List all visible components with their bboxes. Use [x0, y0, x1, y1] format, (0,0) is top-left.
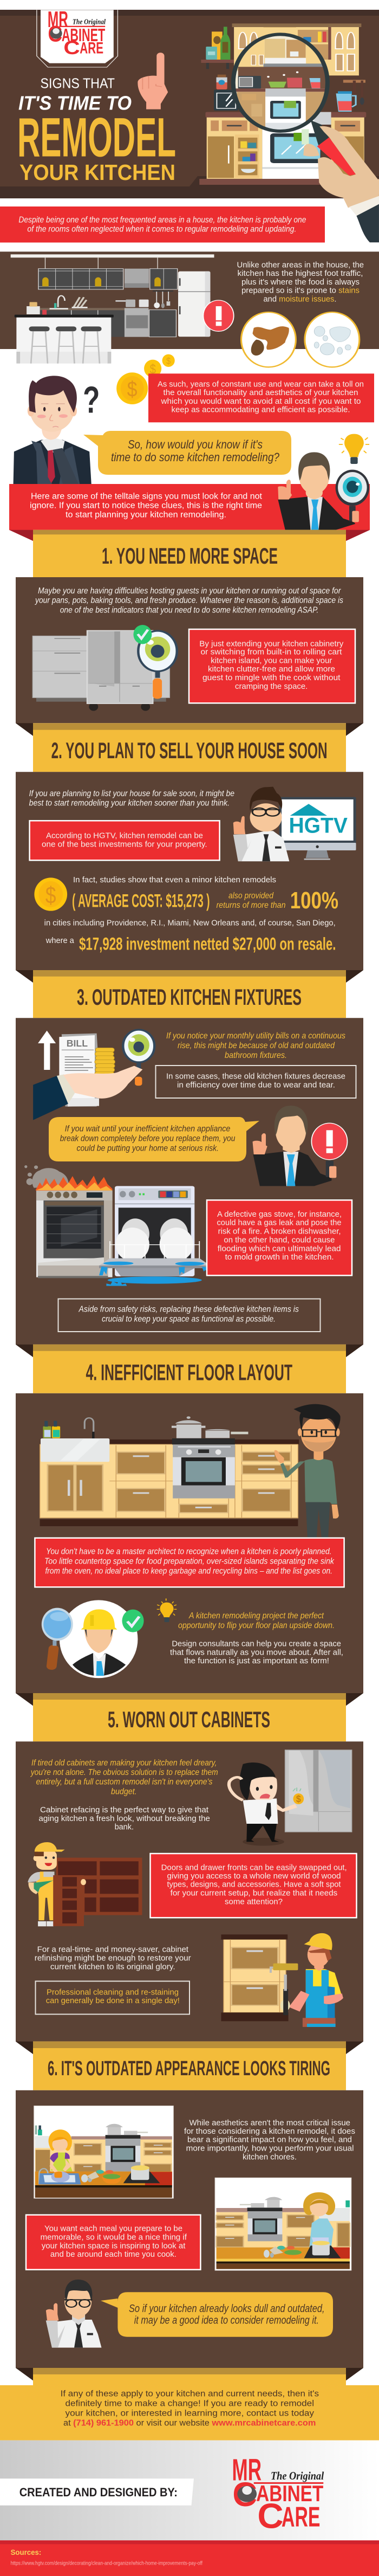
- panel: red cabinetry callout: guest to mingle with the cook without: [202, 674, 340, 682]
- upper cabinets: [232, 23, 361, 75]
- illustration: rising bill in hand: BILL: [67, 1038, 88, 1049]
- text: studies and statistics: ( AVERAGE COST: $15,273 ): [72, 890, 210, 911]
- icon: man with glasses waving: [275, 1404, 341, 1538]
- text: tired cabinets: If tired old cabinets are making your kitchen feel dreary,: [31, 1758, 217, 1767]
- icon: warning alert: [203, 300, 234, 331]
- panel: inspiring kitchen red callout: You want each meal you prepare to be: [44, 2225, 182, 2233]
- illustration: leaking dishwasher: [99, 1186, 210, 1286]
- panel: contact call to action: [0, 2368, 379, 2441]
- illustration: gray rolling cabinet with magnifier: [32, 625, 177, 711]
- text: refinishing: [35, 1946, 191, 1971]
- illustration: rising bill in hand: [33, 1030, 154, 1120]
- speech bubble: serious risk: could be putting your home at serious risk.: [77, 1144, 219, 1153]
- panel: doors and drawers red callout: Doors and drawer fronts can be easily swapped out,: [161, 1863, 347, 1872]
- panel: poor planning red callout: Too little countertop space for food preparation, over-sized islands separating the sink: [44, 1557, 335, 1566]
- text: utility bills: rise, this might be because of old and outdated: [178, 1041, 335, 1050]
- text: aesthetics: bear a significant impact on how you feel, and: [187, 2136, 352, 2145]
- icon: coins: $: [150, 361, 156, 377]
- icon: man with alert sign: [252, 1106, 347, 1186]
- panel: foot traffic band: [0, 251, 379, 349]
- text: aesthetics: for those considering a kitchen remodel, it does: [184, 2127, 355, 2136]
- icon: coins: $: [166, 356, 171, 366]
- illustration: burning oven: [24, 1165, 113, 1278]
- illustration: woman washing dishes: [34, 2106, 173, 2198]
- panel: red cost callout: [148, 373, 374, 422]
- panel: intro text: Despite being one of the most frequented areas in a house, the kitchen is probably one: [18, 216, 306, 225]
- panel: contact call to action: your kitchen, or interested in learning more, contact us today: [65, 2409, 314, 2418]
- panel: HGTV red callout: According to HGTV, kitchen remodel can be: [46, 832, 203, 841]
- icon: pointing hand: [138, 53, 168, 109]
- panel: section 3 body: [16, 1018, 363, 1357]
- text: aesthetics: While aesthetics aren't the most critical issue: [190, 2119, 350, 2127]
- section heading: 2: [33, 723, 346, 772]
- logo: header badge: [37, 7, 117, 67]
- base cabinets: [199, 112, 366, 185]
- panel: credits footer: [0, 2441, 379, 2540]
- text: refinishing: refinishing might be enough to restore your: [35, 1954, 191, 1962]
- text: floor plan opportunity: [170, 1611, 343, 1665]
- text: tired cabinets: you're not alone. The obvious solution is to replace them: [30, 1768, 218, 1777]
- illustration: man with HGTV monitor: [233, 787, 356, 861]
- section heading: 1: [33, 530, 346, 577]
- jar and microwave: [214, 75, 238, 111]
- panel: section 2 body: [16, 772, 363, 983]
- panel: gas stove red callout: risk of a fire. A broken dishwasher,: [218, 1228, 341, 1236]
- logo: header badge: C: [63, 37, 80, 59]
- callout: safety risks: Aside from safety risks, replacing these defective kitchen items is: [79, 1305, 299, 1314]
- illustration: kitchen with magnifying glass: [199, 23, 379, 242]
- icon: dollar coin: [34, 877, 67, 911]
- panel: section 4 body: [16, 1393, 363, 1706]
- decoration: section 3 folds: [16, 1345, 363, 1357]
- logo: footer: C: [257, 2496, 284, 2536]
- panel: doors and drawers red callout: some attention?: [225, 1897, 283, 1906]
- callout: professional cleaning: can generally be done in a single day!: [46, 1997, 180, 2005]
- panel: intro text: of the rooms often neglected when it comes to regular remodeling and updating.: [27, 225, 296, 234]
- panel: red cabinetry callout: By just extending your kitchen cabinetry: [199, 640, 344, 648]
- text: refinishing: For a real-time- and money-saver, cabinet: [37, 1946, 188, 1954]
- illustration: kitchen counter: [40, 1416, 299, 1526]
- logo: footer: C: [232, 2475, 257, 2514]
- panel: gas stove red callout: to mold growth in the kitchen.: [225, 1253, 334, 1262]
- illustration: worker painting cabinet: [221, 1933, 343, 2027]
- panel: red cabinetry callout: kitchen island, you can make your: [211, 656, 332, 665]
- panel: doors and drawers red callout: for your current setup, but realize that it needs: [171, 1889, 337, 1897]
- panel: doors and drawers red callout: [151, 1854, 356, 1918]
- text: foot traffic: and moisture issues.: [263, 295, 337, 304]
- text: refinishing: current kitchen to its original glory.: [50, 1962, 175, 1971]
- callout: safety risks: crucial to keep your space as functional as possible.: [102, 1315, 276, 1324]
- illustration: modern kitchen with island: [11, 254, 214, 364]
- panel: gas stove red callout: flooding which can ultimately lead: [218, 1244, 341, 1253]
- text: foot traffic: kitchen has the highest foot traffic,: [237, 269, 363, 278]
- panel: HGTV red callout: [30, 821, 220, 860]
- left shelf with bottles: [201, 27, 235, 69]
- text: foot traffic: [237, 261, 364, 304]
- text: aesthetics: more importantly, how you perform your usual: [186, 2144, 354, 2153]
- panel: HGTV red callout: one of the best investments for your property.: [42, 840, 207, 849]
- section heading: 5: [33, 1693, 346, 1741]
- utensils and jug: [336, 80, 365, 112]
- logo: footer: ARE: [282, 2501, 320, 2533]
- callout: professional cleaning: Professional cleaning and re-staining: [47, 1989, 179, 1997]
- title: SIGNS THAT: [40, 75, 115, 91]
- text: floor plan opportunity: Design consultants can help you create a space: [172, 1640, 341, 1649]
- panel: inspiring kitchen red callout: and be around each time you cook.: [50, 2250, 177, 2259]
- panel: poor planning red callout: [35, 1538, 344, 1587]
- magnifying glass frame: [233, 34, 328, 131]
- speech bubble: how would you know: [83, 431, 291, 475]
- logo: header badge: C: [48, 21, 62, 47]
- panel: header background: [0, 10, 379, 198]
- logo: footer: ABINET: [256, 2481, 323, 2506]
- text: tired cabinets: aging kitchen a fresh look, without breaking the: [38, 1815, 210, 1823]
- panel: section 6 body: [16, 2090, 363, 2380]
- icon: man with magnifier: [278, 452, 369, 530]
- icon: coins: [116, 354, 175, 404]
- panel: telltale signs banner: to start planning your kitchen remodeling.: [66, 510, 226, 519]
- panel: credits footer: CREATED AND DESIGNED BY:: [19, 2485, 178, 2499]
- panel: inspiring kitchen red callout: [26, 2215, 200, 2270]
- text: studies and statistics: returns of more than: [217, 901, 286, 910]
- panel: poor planning red callout: from the oven, no ideal place to keep garbage and recycling bins – and the list goes on.: [45, 1566, 332, 1576]
- panel: doors and drawers red callout: giving you access to a whole new world of wood: [167, 1872, 341, 1881]
- panel: intro text: [0, 206, 325, 243]
- panel: contact call to action: If any of these apply to your kitchen and current needs, then it's: [61, 2390, 319, 2399]
- text: foot traffic: Unlike other areas in the house, the: [237, 261, 364, 269]
- panel: red cost callout: keep as accommodating and efficient as possible.: [171, 406, 350, 415]
- speech bubble: serious risk: [49, 1117, 259, 1161]
- icon: man in glasses pointing: [46, 2280, 101, 2348]
- panel: telltale signs banner: ignore. If you start to notice these clues, this is the right time: [30, 501, 262, 510]
- logo: header badge: MR: [48, 7, 68, 32]
- text: tired cabinets: entirely, but a full custom remodel isn't in everyone's: [36, 1778, 212, 1787]
- icon: stain circle: [241, 312, 296, 367]
- panel: red cost callout: which you would want to avoid at all cost if you want to: [160, 397, 361, 406]
- speech bubble: how would you know: time to do some kitchen remodeling?: [111, 450, 280, 464]
- illustration: worker with wood cabinet: [28, 1842, 142, 1926]
- text: floor plan opportunity: opportunity to flip your floor plan upside down.: [178, 1621, 335, 1630]
- logo: header badge: ARE: [80, 39, 103, 57]
- text: tired cabinets: budget.: [111, 1787, 137, 1796]
- icon: thinking man: [14, 376, 100, 484]
- section heading: 3: [33, 970, 346, 1018]
- panel: contact call to action: at (714) 961-1900 or visit our website www.mrcabinetcare.com: [63, 2418, 316, 2427]
- panel: sources: https://www.hgtv.com/design/decorating/clean-and-organize/which-home-improvements-pay-off: [11, 2560, 202, 2566]
- section heading: 5: 5. WORN OUT CABINETS: [108, 1707, 270, 1732]
- speech bubble: dull and outdated: [101, 2292, 333, 2337]
- text: aesthetics: [184, 2119, 355, 2161]
- text: floor plan opportunity: the function is just as important as form!: [184, 1657, 329, 1665]
- text: floor plan opportunity: that flows naturally as you move about. After all,: [170, 1648, 343, 1657]
- section heading: 6: [33, 2042, 346, 2090]
- decoration: section 6 folds: [16, 2368, 363, 2380]
- panel: gas stove red callout: [207, 1200, 352, 1275]
- text: studies and statistics: in cities including Providence, R.I., Miami, New Orleans and, of course, San Diego,: [44, 919, 336, 927]
- panel: poor planning red callout: You don't have to be a master architect to recognize when a kitchen is poorly planned.: [46, 1547, 331, 1556]
- illustration: worn cabinet and surprised man: $: [296, 1794, 301, 1804]
- panel: telltale signs banner: Here are some of the telltale signs you must look for and not: [31, 492, 263, 501]
- text: floor plan opportunity: A kitchen remodeling project the perfect: [188, 1611, 324, 1621]
- text: tired cabinets: bank.: [115, 1823, 134, 1831]
- text: foot traffic: plus it's where the food is always: [241, 278, 360, 287]
- text: foot traffic: prepared so is it's prone to stains: [241, 287, 360, 295]
- icon: dollar coin: $: [45, 882, 56, 908]
- text: studies and statistics: 100%: [290, 887, 338, 914]
- stove body: [262, 112, 331, 179]
- text: utility bills: [166, 1031, 345, 1060]
- illustration: woman cooking: [215, 2178, 351, 2270]
- text: studies and statistics: [44, 876, 338, 954]
- panel: contact call to action: definitely time to make a change! If you are ready to remodel: [65, 2399, 314, 2408]
- text: tired cabinets: [30, 1758, 218, 1831]
- callout: efficiency: [156, 1066, 356, 1098]
- title: [17, 75, 176, 185]
- speech bubble: how would you know: So, how would you know if it's: [128, 437, 263, 451]
- icon: engineer with magnifier: [42, 1600, 144, 1678]
- panel: section 2 body: If you are planning to list your house for sale soon, it might be: [29, 789, 234, 798]
- text: aesthetics: kitchen chores.: [243, 2153, 297, 2161]
- callout: efficiency: In some cases, these old kitchen fixtures decrease: [166, 1073, 345, 1081]
- panel: inspiring kitchen red callout: memorable, so it would be a nice thing if: [40, 2233, 187, 2242]
- icon: moisture circle: [305, 312, 360, 367]
- text: studies and statistics: In fact, studies show that even a minor kitchen remodels: [73, 876, 276, 885]
- panel: red cabinetry callout: or switching from built-in to rolling cart: [200, 648, 342, 656]
- text: tired cabinets: Cabinet refacing is the perfect way to give that: [40, 1806, 208, 1815]
- icon: coins: $: [127, 377, 138, 402]
- panel: section 1 body: Maybe you are having difficulties hosting guests in your kitchen or running out of space for: [38, 586, 341, 596]
- panel: section 1 body: [16, 577, 363, 736]
- text: utility bills: bathroom fixtures.: [225, 1051, 287, 1060]
- panel: gas stove red callout: A defective gas stove, for instance,: [217, 1210, 342, 1219]
- speech bubble: serious risk: If you wait until your inefficient kitchen appliance: [65, 1124, 230, 1133]
- logo: header badge: ABINET: [62, 25, 105, 46]
- panel: section 2 body: best to start remodeling your kitchen sooner than you think.: [29, 799, 230, 808]
- logo: footer: The Original: [271, 2470, 324, 2482]
- panel: doors and drawers red callout: types, designs, and accessories. Have a soft spot: [167, 1881, 341, 1889]
- callout: safety risks: [58, 1299, 321, 1332]
- illustration: worn cabinet and surprised man: [229, 1750, 352, 1846]
- panel: gas stove red callout: on the other hand, could cause: [224, 1236, 335, 1244]
- text: studies and statistics: where a: [45, 937, 75, 945]
- title: YOUR KITCHEN: [19, 160, 175, 185]
- panel: red cost callout: the overall functionality and aesthetics of your kitchen: [164, 389, 358, 397]
- panel: section 5 body: [16, 1741, 363, 2054]
- panel: red cabinetry callout: kitchen clutter-free and allow more: [208, 665, 335, 674]
- title: IT'S TIME TO: [18, 92, 132, 114]
- panel: inspiring kitchen red callout: your kitchen space is inspiring to look at: [42, 2242, 185, 2250]
- magnifying glass handle and hand: [303, 120, 379, 242]
- icon: small light bulb: [157, 1598, 177, 1622]
- panel: red cabinetry callout: cramping the space.: [235, 682, 308, 691]
- panel: telltale signs banner: [9, 484, 370, 541]
- callout: professional cleaning: [36, 1981, 190, 2014]
- icon: light bulb: [339, 434, 369, 464]
- panel: section 1 body: one of the best indicators that you need to do some kitchen remodeling ASAP.: [60, 606, 318, 615]
- callout: efficiency: in efficiency over time due to wear and tear.: [177, 1081, 335, 1090]
- text: utility bills: If you notice your monthly utility bills on a continuous: [166, 1031, 345, 1041]
- panel: sources: Sources:: [11, 2548, 41, 2556]
- panel: gas stove red callout: could have a gas leak and pose the: [217, 1219, 341, 1228]
- speech bubble: dull and outdated: it may be a good idea to consider remodeling it.: [134, 2314, 319, 2326]
- text: studies and statistics: also provided: [228, 891, 274, 900]
- decoration: section 5 folds: [16, 2042, 363, 2054]
- panel: red cabinetry callout: [189, 629, 355, 703]
- logo: footer: [232, 2453, 324, 2536]
- section heading: 4: [33, 1345, 346, 1393]
- logo: header badge: The Original: [73, 17, 106, 26]
- decoration: section 4 folds: [16, 1693, 363, 1706]
- title: REMODEL: [17, 106, 176, 168]
- panel: sources: [0, 2540, 379, 2576]
- logo: footer: MR: [232, 2453, 262, 2487]
- illustration: man with HGTV monitor: HGTV: [289, 814, 348, 838]
- speech bubble: serious risk: break down completely before you replace them, you: [60, 1134, 235, 1143]
- panel: red cost callout: As such, years of constant use and wear can take a toll on: [158, 380, 364, 389]
- icon: thinking man: ?: [83, 378, 100, 421]
- speech bubble: dull and outdated: So if your kitchen already looks dull and outdated,: [129, 2303, 325, 2315]
